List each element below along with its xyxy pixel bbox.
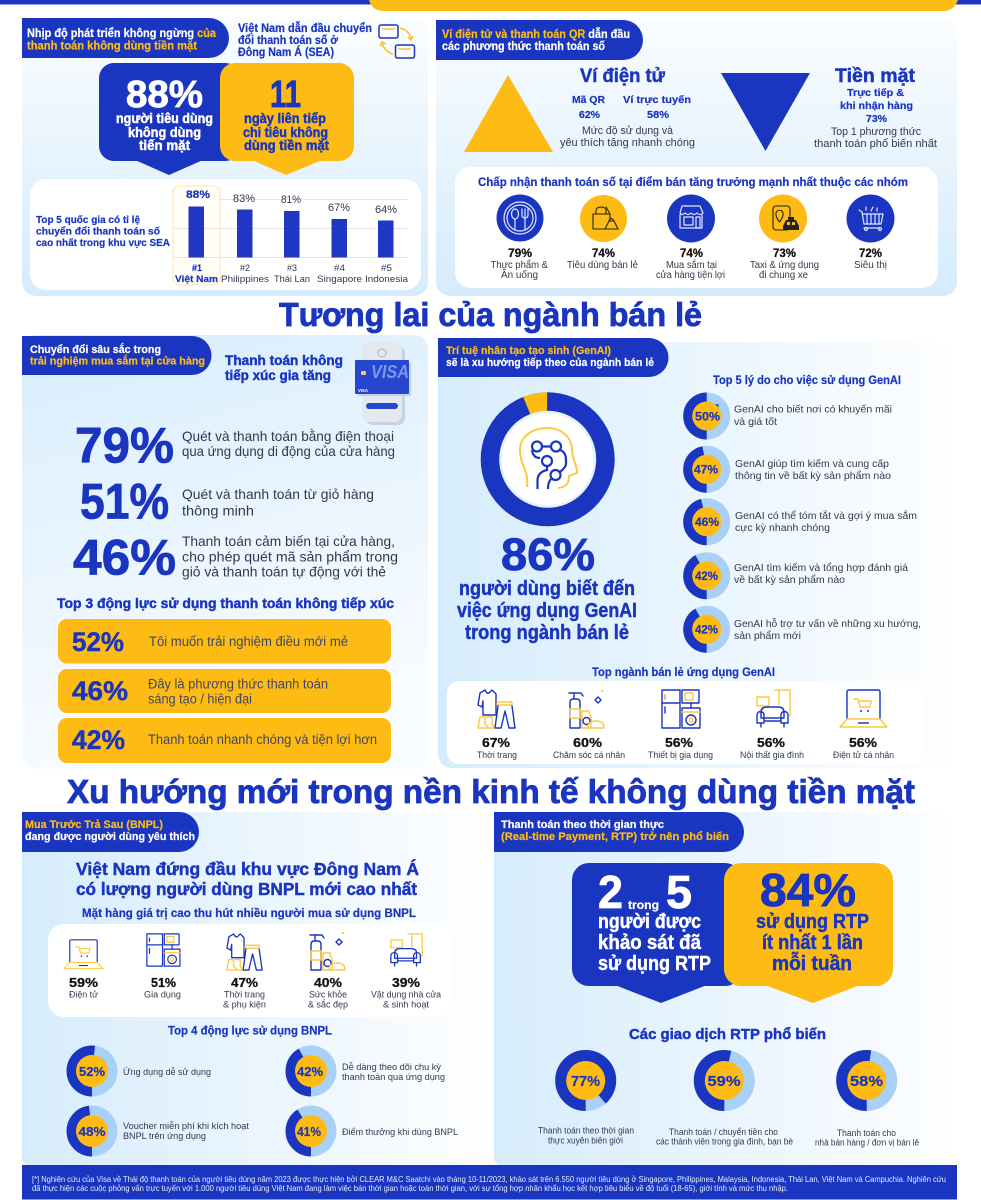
- reason: 50%: và giá tốt: [734, 416, 777, 428]
- heading: Vietnam leads: Đông Nam Á (SEA): [238, 46, 334, 59]
- label: food: Thực phẩm &: [490, 259, 548, 271]
- driver: 52%: [66, 1046, 211, 1096]
- heading: high-value items: Mặt hàng giá trị cao thu hút nhiều người mua sử dụng BNPL: [82, 908, 416, 920]
- footer: source note: đã thực hiện các cuộc phỏng vấn trực tuyến với 1.000 người tiêu dùng Việt Nam đang làm việc bán thời gian hoặc toàn thời gian, với sự tổng hợp nhân khẩu học kết hợp tiêu biểu về độ tuổi (18-65), giới tính và mức thu nhập.: [32, 1184, 788, 1193]
- icon: phone and visa card: [355, 342, 411, 425]
- panel heading: Trí tuệ nhân tạo tạo sinh (GenAI): [446, 345, 611, 357]
- panel heading: Mua Trước Trả Sau (BNPL): [25, 819, 163, 831]
- row: 52%: Tôi muốn trải nghiệm điều mới mẻ: [149, 634, 348, 649]
- icon: food: [496, 194, 544, 242]
- driver: 48%: [66, 1106, 249, 1156]
- driver: 52%: Ứng dụng dễ sử dụng: [123, 1067, 211, 1078]
- callout: 84%: mỗi tuần: [772, 951, 852, 975]
- card: categories: [455, 167, 938, 288]
- label: household: Vật dụng nhà cửa: [371, 990, 442, 1000]
- callout: 88%: không dùng: [128, 125, 201, 140]
- panel heading: các phương thức thanh toán số: [442, 41, 605, 53]
- driver: 42%: [286, 1046, 445, 1096]
- label: furniture: [740, 736, 804, 761]
- reason: 42% reviews: về bất kỳ sản phẩm nào: [734, 574, 845, 586]
- label: personal care: Chăm sóc cá nhân: [553, 750, 625, 761]
- panel heading: (Real-time Payment, RTP) trở nên phổ biến: [501, 831, 729, 843]
- card: top sectors: [447, 681, 923, 764]
- stat: 46%: [73, 530, 398, 586]
- panel heading: [22, 18, 229, 58]
- text block: e-wallet: Ví điện tử: [580, 66, 665, 87]
- text block: e-wallet: Ví trực tuyến: [623, 94, 691, 106]
- reason: 47%: GenAI giúp tìm kiếm và cung cấp: [735, 458, 889, 470]
- transaction: 59%: [656, 1050, 793, 1146]
- callout: 88%: 88%: [126, 74, 203, 116]
- card: top 5 countries bar chart: Indonesia: [365, 274, 409, 285]
- text block: cash: Trực tiếp &: [847, 87, 904, 99]
- reason: 42% advice: sản phẩm mới: [734, 630, 801, 642]
- label: retail: [567, 248, 638, 271]
- stat: 86%: trong ngành bán lẻ: [465, 622, 629, 644]
- reason: 50%: 50%: [695, 412, 720, 424]
- panel heading: Chuyển đổi sâu sắc trong: [30, 343, 161, 356]
- reason: 42% reviews: GenAI tìm kiếm và tổng hợp đánh giá: [734, 562, 908, 574]
- heading: popular RTP transactions: Các giao dịch RTP phổ biến: [629, 1026, 826, 1043]
- callout: 88%: người tiêu dùng: [116, 111, 213, 126]
- transaction: 58%: 58%: [850, 1073, 883, 1090]
- transaction: 77%: Thanh toán theo thời gian: [538, 1126, 634, 1136]
- transaction: 59%: 59%: [708, 1073, 740, 1090]
- label: convenience: Mua sắm tại: [666, 258, 717, 271]
- text block: cash: [814, 66, 937, 150]
- label: taxi: đi chung xe: [759, 270, 808, 281]
- reason: 46%: cực kỳ nhanh chóng: [735, 522, 830, 534]
- row: 46%: 46%: [72, 676, 128, 706]
- heading: contactless rising: [225, 352, 343, 383]
- driver: 42%: thanh toán qua ứng dụng: [342, 1072, 445, 1083]
- callout: 84%: [724, 863, 893, 1003]
- row: 42%: [58, 718, 391, 763]
- transaction: 59%: Thanh toán / chuyển tiền cho: [669, 1127, 778, 1137]
- row: 52%: [58, 619, 391, 664]
- reason: 47%: thông tin về bất kỳ sản phẩm nào: [735, 470, 891, 482]
- row: 46%: sáng tạo / hiện đại: [148, 692, 252, 706]
- text block: e-wallet: yêu thích tăng nhanh chóng: [560, 137, 695, 149]
- stat: 51%: Quét và thanh toán từ giỏ hàng: [182, 486, 374, 502]
- callout: 2 in 5: khảo sát đã: [598, 932, 702, 954]
- label: convenience: [656, 248, 725, 281]
- stat: 79%: [75, 418, 395, 474]
- icon: supermarket cart: [846, 194, 894, 242]
- card: top 5 countries bar chart: Thái Lan: [274, 274, 310, 285]
- label: home appliances: Gia dụng: [144, 990, 181, 1000]
- text block: e-wallet: 62%: [579, 109, 601, 121]
- reason: 50%: [683, 392, 892, 440]
- driver: 42%: Dễ dàng theo dõi chu kỳ: [342, 1062, 441, 1073]
- label: electronics: [69, 976, 99, 1000]
- label: household: & sinh hoạt: [383, 1000, 429, 1010]
- callout: 2 in 5: [572, 863, 742, 1003]
- section title: retail future: Tương lai của ngành bán lẻ: [279, 296, 702, 333]
- card: top 5 countries bar chart: #1: [192, 263, 203, 274]
- icon: laptop: [840, 690, 887, 727]
- card: top 5 countries bar chart: 64%: [375, 204, 397, 216]
- label: fashion: Thời trang: [477, 750, 517, 761]
- footer: source note: [*] Nghiên cứu của Visa về Thái độ thanh toán của người tiêu dùng năm 2023 được thực hiện bởi CLEAR M&C Saatchi vào tháng 10-11/2023, khảo sát trên 6.550 người tiêu dùng ở Singapore, Philippines, Malaysia, Indonesia, Thái Lan, Việt Nam và Campuchia. Nghiên cứu: [32, 1175, 946, 1184]
- icon: down triangle: [721, 73, 810, 151]
- heading: Vietnam tops BNPL: [76, 858, 419, 899]
- stat: 86%: người dùng biết đến: [459, 578, 635, 600]
- panel heading: trải nghiệm mua sắm tại cửa hàng: [30, 354, 205, 368]
- label: electronics: 56%: [849, 736, 877, 750]
- transaction: 58%: nhà bán hàng / đơn vị bán lẻ: [815, 1138, 919, 1148]
- transaction: 59%: các thành viên trong gia đình, bạn bè: [656, 1136, 793, 1146]
- icon: laptop: [64, 940, 103, 969]
- callout: 2 in 5: 5: [666, 866, 692, 918]
- panel heading: sẽ là xu hướng tiếp theo của ngành bán lẻ: [446, 357, 654, 369]
- label: fashion: & phụ kiện: [223, 1000, 266, 1010]
- label: retail: 74%: [592, 248, 615, 260]
- panel heading: [22, 336, 212, 375]
- transaction: 58%: Thanh toán cho: [837, 1128, 896, 1138]
- stat: 86%: 86%: [501, 529, 595, 580]
- driver: 48%: BNPL trên ứng dụng: [123, 1131, 206, 1142]
- heading: Vietnam leads: đổi thanh toán số ở: [238, 35, 339, 47]
- stat: 86%: việc ứng dụng GenAI: [457, 600, 637, 622]
- label: retail: Tiêu dùng bán lẻ: [567, 260, 638, 271]
- card: top 5 countries bar chart: 67%: [328, 202, 350, 214]
- row: 42%: Thanh toán nhanh chóng và tiện lợi hơn: [148, 732, 377, 747]
- label: food: [490, 248, 548, 281]
- card: top 5 countries bar chart: cao nhất trong khu vực SEA: [36, 237, 170, 249]
- stat: 46%: giỏ và thanh toán tự động với thẻ: [182, 564, 386, 580]
- heading: Vietnam leads: Việt Nam dẫn đầu chuyển: [238, 22, 372, 35]
- reason: 47%: [683, 446, 891, 493]
- callout: 2 in 5: người được: [598, 911, 701, 933]
- footer: source note: [22, 1165, 957, 1200]
- reason: 46%: [683, 498, 917, 545]
- label: home appliances: [144, 976, 181, 1000]
- panel heading: [436, 20, 643, 60]
- label: fashion: 47%: [231, 976, 258, 990]
- label: electronics: 59%: [69, 976, 98, 990]
- icon: personal care: [569, 690, 604, 728]
- label: fashion: [223, 976, 266, 1010]
- driver: 48%: Voucher miễn phí khi kích hoạt: [123, 1121, 249, 1132]
- callout: 88%: tiến mặt: [139, 138, 190, 153]
- driver: 41%: Điểm thưởng khi dùng BNPL: [342, 1127, 458, 1138]
- heading: contactless rising: Thanh toán không: [225, 352, 343, 368]
- heading: Vietnam leads: [238, 22, 372, 59]
- callout: 11 days: dùng tiền mặt: [244, 138, 329, 153]
- icon: beauty: [310, 932, 345, 970]
- card: top 5 countries bar chart: 81%: [281, 194, 301, 206]
- heading: Vietnam tops BNPL: Việt Nam đứng đầu khu vực Đông Nam Á: [76, 858, 419, 879]
- panel: GenAI: [438, 338, 950, 768]
- text block: e-wallet: Mức độ sử dụng và: [582, 125, 674, 137]
- label: food: Ăn uống: [501, 268, 538, 281]
- heading: Vietnam tops BNPL: có lượng người dùng BNPL mới cao nhất: [76, 879, 417, 899]
- label: household: [371, 976, 442, 1010]
- heading: top sectors: Top ngành bán lẻ ứng dụng GenAI: [592, 667, 775, 679]
- heading: top 4 BNPL: Top 4 động lực sử dụng BNPL: [168, 1024, 332, 1038]
- callout: 11 days: [220, 63, 354, 175]
- label: beauty: 40%: [314, 976, 342, 990]
- stat: 46%: 46%: [73, 530, 176, 586]
- icon: phone and visa card: VISA: [358, 388, 369, 393]
- driver: 48%: 48%: [78, 1124, 106, 1139]
- driver: 41%: 41%: [297, 1124, 321, 1139]
- driver: 42%: 42%: [297, 1064, 323, 1079]
- card: top 5 countries bar chart: 83%: [233, 193, 255, 205]
- label: fashion: 67%: [482, 736, 510, 750]
- driver: 52%: 52%: [79, 1064, 105, 1079]
- heading: top 3 motivations: Top 3 động lực sử dụng thanh toán không tiếp xúc: [57, 595, 394, 611]
- callout: 84%: sử dụng RTP: [756, 911, 869, 933]
- label: electronics: [833, 736, 894, 761]
- callout: 11 days: chi tiêu không: [243, 125, 328, 140]
- stat: 46%: Thanh toán cảm biến tại cửa hàng,: [182, 533, 395, 549]
- card: BNPL categories: [48, 924, 451, 1017]
- text block: e-wallet: 58%: [647, 109, 670, 121]
- icon: taxi app: [759, 194, 807, 242]
- text block: cash: Tiền mặt: [835, 66, 916, 87]
- panel: real-time payment: [494, 812, 950, 1167]
- icon: furniture: [757, 690, 790, 727]
- reason: 50%: GenAI cho biết nơi có khuyến mãi: [734, 404, 892, 416]
- chart: 86% donut with AI head icon: [481, 392, 615, 526]
- reason: 42% advice: GenAI hỗ trợ tư vấn về những xu hướng,: [734, 617, 921, 630]
- label: supermarket: Siêu thị: [854, 260, 887, 271]
- panel heading: [22, 812, 199, 852]
- callout: 11 days: ngày liên tiếp: [244, 111, 326, 126]
- panel heading: Thanh toán theo thời gian thực: [501, 819, 664, 831]
- icon: shopping bags: [580, 195, 627, 242]
- text block: cash: thanh toán phổ biến nhất: [814, 138, 937, 150]
- panel: contactless: [22, 335, 428, 769]
- label: beauty: Sức khỏe: [309, 990, 347, 1000]
- transaction: 77%: [538, 1050, 634, 1146]
- callout: 88%: [99, 63, 240, 175]
- driver: 41%: [286, 1106, 458, 1156]
- stat: 79%: 79%: [75, 418, 174, 474]
- label: appliances: 56%: [665, 736, 693, 750]
- row: 42%: 42%: [72, 725, 125, 755]
- label: convenience: cửa hàng tiện lợi: [656, 269, 725, 281]
- panel: cashless growth: [22, 18, 428, 296]
- label: personal care: 60%: [573, 736, 602, 750]
- label: electronics: Điện tử cá nhân: [833, 750, 894, 761]
- text block: cash: Top 1 phương thức: [831, 126, 921, 138]
- card: top 5 countries bar chart: 88%: [186, 189, 210, 201]
- label: furniture: Nội thất gia đình: [740, 750, 804, 761]
- stat: 79%: Quét và thanh toán bằng điện thoại: [182, 428, 394, 444]
- row: 46%: [58, 669, 391, 713]
- label: supermarket: [854, 248, 887, 271]
- card: categories: Chấp nhận thanh toán số tại điểm bán tăng trưởng mạnh nhất thuộc các nhóm: [478, 177, 908, 189]
- callout: 2 in 5: sử dụng RTP: [598, 953, 711, 975]
- transaction: 77%: 77%: [571, 1073, 600, 1090]
- label: household: 39%: [392, 976, 420, 990]
- callout: 84%: 84%: [760, 864, 856, 916]
- panel heading: [438, 338, 668, 377]
- text block: cash: 73%: [866, 113, 888, 125]
- label: taxi: 73%: [773, 248, 796, 260]
- stat: 46%: cho phép quét mã sản phẩm trong: [182, 548, 398, 564]
- card: top 5 countries bar chart: [30, 179, 421, 290]
- panel heading: đang được người dùng yêu thích: [25, 831, 195, 843]
- transaction: 58%: [815, 1050, 919, 1148]
- icon: appliances: [147, 934, 180, 966]
- label: fashion: [477, 736, 517, 761]
- stat: 51%: 51%: [80, 474, 169, 530]
- card: top 5 countries bar chart: Việt Nam: [175, 274, 218, 285]
- panel heading: thanh toán không dùng tiền mặt: [27, 40, 197, 52]
- reason: 42% advice: [683, 606, 921, 653]
- card: top 5 countries bar chart: #2: [240, 263, 250, 274]
- callout: 84%: ít nhất 1 lần: [762, 932, 863, 954]
- label: taxi: [750, 248, 819, 281]
- label: beauty: & sắc đẹp: [308, 1000, 348, 1010]
- reason: 46%: GenAI có thể tóm tắt và gợi ý mua sắm: [735, 509, 917, 522]
- label: appliances: Thiết bị gia dụng: [648, 750, 713, 761]
- reason: 46%: 46%: [695, 517, 719, 529]
- panel heading: Nhịp độ phát triển không ngừng của: [27, 28, 217, 40]
- callout: 2 in 5: 2: [598, 866, 623, 918]
- icon: store: [667, 194, 715, 242]
- panel: e-wallet and QR: [436, 18, 957, 296]
- icon: card transfer: [379, 25, 414, 58]
- label: taxi: Taxi & ứng dụng: [750, 260, 819, 271]
- reason: 42% advice: 42%: [695, 624, 718, 636]
- card: top 5 countries bar chart: Philippines: [221, 274, 269, 285]
- section title: new trends: Xu hướng mới trong nền kinh tế không dùng tiền mặt: [67, 774, 915, 811]
- text block: cash: khi nhận hàng: [840, 100, 913, 112]
- icon: clothing: [227, 934, 262, 970]
- label: fashion: Thời trang: [224, 990, 265, 1000]
- icon: up triangle: [464, 75, 553, 152]
- label: food: 79%: [508, 248, 532, 260]
- icon: clothing: [478, 690, 515, 728]
- card: top 5 countries bar chart: #5: [381, 263, 392, 274]
- reason: 42% reviews: [683, 552, 908, 599]
- label: beauty: [308, 976, 348, 1010]
- heading: contactless rising: tiếp xúc gia tăng: [225, 367, 331, 383]
- stat: 51%: [80, 474, 374, 530]
- panel: BNPL: [22, 812, 476, 1167]
- icon: phone and visa card: VISA: [371, 362, 409, 382]
- stat: 79%: qua ứng dụng di động của cửa hàng: [182, 443, 395, 459]
- label: personal care: [553, 736, 625, 761]
- icon: appliances: [662, 690, 700, 728]
- panel heading: Ví điện tử và thanh toán QR dẫn đầu: [442, 28, 630, 41]
- label: appliances: [648, 736, 713, 761]
- transaction: 77%: thực xuyên biên giới: [548, 1136, 623, 1146]
- label: supermarket: 72%: [859, 248, 882, 260]
- row: 46%: Đây là phương thức thanh toán: [148, 676, 328, 692]
- label: electronics: Điện tử: [69, 990, 99, 1000]
- stat: 51%: thông minh: [182, 502, 254, 518]
- icon: furniture: [391, 934, 422, 966]
- label: home appliances: 51%: [151, 976, 176, 990]
- card: top 5 countries bar chart: #4: [334, 263, 345, 274]
- card: top 5 countries bar chart: Singapore: [317, 274, 362, 285]
- label: furniture: 56%: [757, 736, 785, 750]
- row: 52%: 52%: [72, 627, 124, 657]
- card: top 5 countries bar chart: chuyển đổi thanh toán số: [36, 226, 161, 238]
- panel heading: [494, 812, 744, 852]
- top banner strip: [0, 0, 981, 11]
- text block: e-wallet: [560, 66, 695, 149]
- stat: 86%: [457, 529, 637, 644]
- callout: 11 days: 11: [270, 74, 301, 116]
- reason: 47%: 47%: [694, 464, 718, 476]
- card: top 5 countries bar chart: Top 5 quốc gia có tỉ lệ: [36, 214, 140, 226]
- label: convenience: 74%: [680, 248, 703, 260]
- reason: 42% reviews: 42%: [695, 571, 718, 583]
- heading: top 5 reasons: Top 5 lý do cho việc sử dụng GenAI: [713, 375, 901, 387]
- card: top 5 countries bar chart: #3: [287, 263, 297, 274]
- callout: 2 in 5: trong: [628, 898, 659, 912]
- text block: e-wallet: Mã QR: [572, 94, 605, 106]
